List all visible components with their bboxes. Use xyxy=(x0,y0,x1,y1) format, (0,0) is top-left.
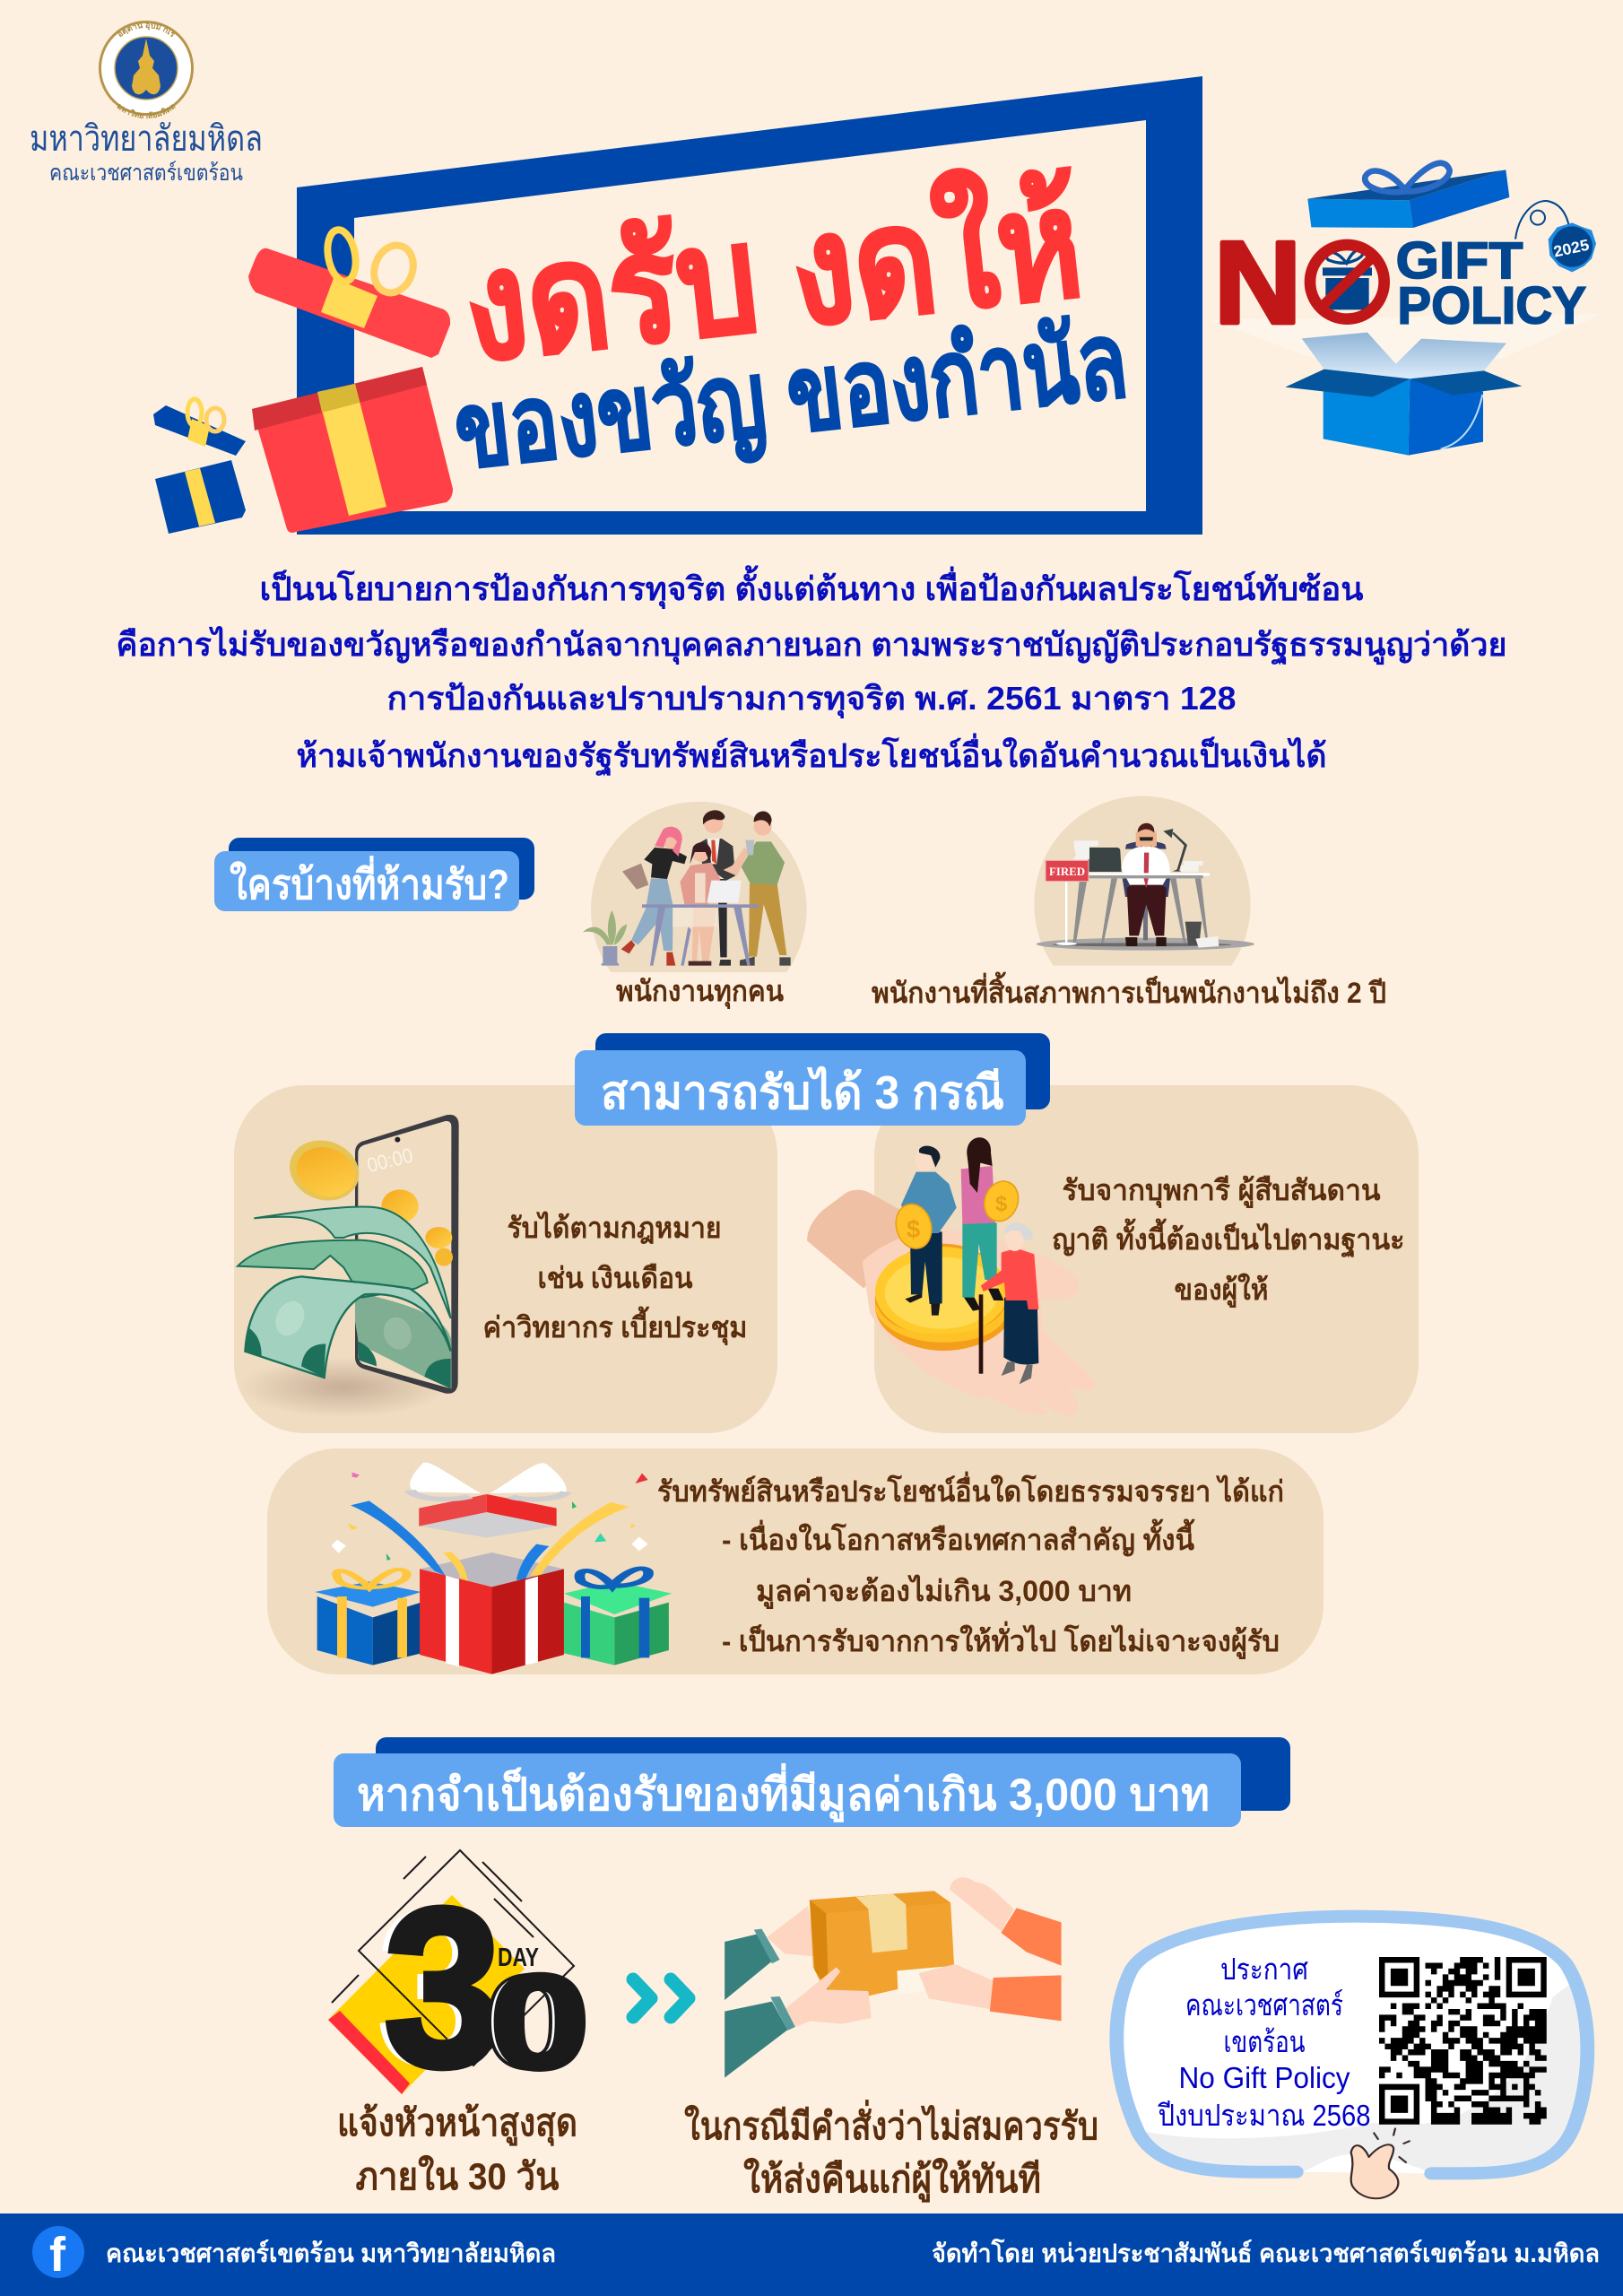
icon: Facebook: f xyxy=(49,2228,66,2282)
banknotes xyxy=(238,1206,451,1388)
icon: small blue gift box xyxy=(153,399,246,534)
paper stack xyxy=(1073,840,1098,859)
footer bar: คณะเวชศาสตร์เขตร้อน มหาวิทยาลัยมหิดล xyxy=(106,2239,556,2267)
tag 2025 xyxy=(1515,201,1596,272)
badge: three cases xyxy=(575,1033,1050,1126)
tag 2025: 2025 xyxy=(1552,236,1591,261)
policy description text xyxy=(117,565,1506,777)
sign: fired xyxy=(1046,860,1089,945)
badge: who may not accept: ใครบ้างที่ห้ามรับ? xyxy=(230,856,509,908)
middle man xyxy=(697,810,735,957)
text: notify supervisor: แจ้งหัวหน้าสูงสุด xyxy=(337,2101,577,2146)
label: all staff: พนักงานทุกคน xyxy=(616,975,784,1010)
illustration: phone, coins and banknotes xyxy=(238,1115,459,1417)
chair xyxy=(1123,841,1170,940)
illustration: hands returning a parcel xyxy=(725,1877,1062,2078)
box interior xyxy=(420,1552,564,1587)
man: $ xyxy=(907,1215,920,1243)
trash bin xyxy=(1185,922,1202,945)
footer bar xyxy=(0,2213,1623,2296)
no symbol xyxy=(1310,245,1384,319)
text: notify supervisor xyxy=(337,2101,577,2197)
icon: red gift box xyxy=(248,228,453,533)
title heading: ของขวัญ ของกำนัล xyxy=(449,300,1133,494)
title frame xyxy=(297,76,1202,535)
footer bar: จัดทำโดย หน่วยประชาสัมพันธ์ คณะเวชศาสตร์เขตร้อน ม.มหิดล xyxy=(932,2238,1600,2267)
coins xyxy=(282,1131,453,1266)
panel: from relatives xyxy=(874,1085,1419,1433)
illustration: staff team xyxy=(583,802,807,972)
badge: three cases: สามารถรับได้ 3 กรณี xyxy=(601,1065,1004,1119)
logo: No Gift Policy: POLICY xyxy=(1397,277,1586,335)
icon: 30 day: 3 xyxy=(384,1862,502,2114)
logo: Mahidol University: อตฺตานํ อุปมํ กเร xyxy=(118,22,176,38)
panel: ethical gifts xyxy=(267,1448,1324,1674)
policy description text: คือการไม่รับของขวัญหรือของกำนัลจากบุคคลภายนอก ตามพระราชบัญญัติประกอบรัฐธรรมนูญว่าด้วย xyxy=(117,625,1506,665)
phone xyxy=(355,1115,459,1394)
QR code xyxy=(1379,1957,1547,2125)
crumpled paper xyxy=(1195,936,1219,948)
man xyxy=(1122,823,1170,946)
logo: Mahidol University: มหาวิทยาลัยมหิดล xyxy=(117,104,176,118)
icon: 30 day xyxy=(328,1850,590,2114)
illustration: three gift boxes and confetti xyxy=(315,1463,672,1674)
text: ethical gifts: มูลค่าจะต้องไม่เกิน 3,000 บาท xyxy=(756,1574,1132,1610)
label: former staff less than 2 years: พนักงานที่สิ้นสภาพการเป็นพนักงานไม่ถึง 2 ปี xyxy=(872,971,1386,1009)
hand xyxy=(807,1190,1096,1416)
logo: Mahidol University xyxy=(30,21,263,186)
text: from relatives: รับจากบุพการี ผู้สืบสันดาน xyxy=(1062,1174,1381,1209)
gift lid xyxy=(1307,163,1509,228)
grandmother xyxy=(979,1223,1038,1384)
illustration: family on a gold coin in a hand xyxy=(807,1137,1096,1416)
text: return to giver xyxy=(684,2100,1098,2203)
illustration: phone, coins and banknotes: 00:00 xyxy=(365,1143,415,1177)
gold coin xyxy=(875,1244,1008,1351)
icon: Facebook xyxy=(32,2226,84,2282)
icon: finger heart hand xyxy=(1351,2128,1410,2198)
logo: No Gift Policy: GIFT xyxy=(1396,232,1523,290)
text: announcement: คณะเวชศาสตร์ xyxy=(1185,1988,1343,2022)
illustration: dismissed employee at desk xyxy=(1034,796,1254,966)
text: announcement: เขตร้อน xyxy=(1223,2025,1306,2058)
right man xyxy=(724,812,791,966)
text: ethical gifts: - เนื่องในโอกาสหรือเทศกาลสำคัญ ทั้งนี้ xyxy=(722,1518,1195,1557)
text: announcement: ปีงบประมาณ 2568 xyxy=(1157,2099,1370,2132)
text: announcement: No Gift Policy xyxy=(1178,2061,1350,2094)
flying lid and bow xyxy=(410,1463,567,1537)
logo: Mahidol University: มหาวิทยาลัยมหิดล xyxy=(30,119,263,159)
text: from relatives: ของผู้ให้ xyxy=(1175,1273,1268,1309)
seated woman xyxy=(673,842,720,964)
panel: QR announcement frame xyxy=(1116,1917,1587,2198)
man xyxy=(891,1146,957,1316)
text: ethical gifts: - เป็นการรับจากการให้ทั่วไป โดยไม่เจาะจงผู้รับ xyxy=(722,1621,1280,1660)
policy description text: เป็นนโยบายการป้องกันการทุจริต ตั้งแต่ต้นทาง เพื่อป้องกันผลประโยชน์ทับซ้อน xyxy=(260,565,1364,610)
text: from relatives: ญาติ ทั้งนี้ต้องเป็นไปตามฐานะ xyxy=(1053,1218,1404,1258)
policy description text: ห้ามเจ้าพนักงานของรัฐรับทรัพย์สินหรือประโยชน์อื่นใดอันคำนวณเป็นเงินได้ xyxy=(296,733,1327,777)
blue gift xyxy=(315,1570,421,1665)
plant xyxy=(583,910,627,966)
desk xyxy=(1073,873,1210,944)
logo: Mahidol University: คณะเวชศาสตร์เขตร้อน xyxy=(49,161,243,186)
panel: legal income xyxy=(234,1085,777,1433)
red gift xyxy=(420,1569,564,1674)
sign: fired: FIRED xyxy=(1049,865,1085,878)
streamers xyxy=(351,1500,629,1581)
text: legal income: รับได้ตามกฎหมาย xyxy=(508,1211,721,1244)
books xyxy=(1181,861,1203,872)
title heading: งดรับ งดให้ xyxy=(456,156,1089,393)
policy description text: การป้องกันและปราบปรามการทุจริต พ.ศ. 2561 มาตรา 128 xyxy=(387,680,1236,719)
text: legal income xyxy=(482,1211,748,1346)
text: notify supervisor: ภายใน 30 วัน xyxy=(355,2154,560,2197)
text: from relatives xyxy=(1053,1174,1404,1309)
text: return to giver: ในกรณีมีคำสั่งว่าไม่สมควรรับ xyxy=(684,2100,1098,2147)
pink hair woman xyxy=(621,827,687,966)
parcel xyxy=(810,1891,955,2005)
text: legal income: ค่าวิทยากร เบี้ยประชุม xyxy=(482,1306,748,1346)
title heading xyxy=(449,156,1133,494)
arrow: double chevron xyxy=(633,1979,689,2017)
laptop xyxy=(707,881,742,903)
icon: 30 day: 3 xyxy=(375,1862,493,2114)
desk xyxy=(642,904,759,966)
text: announcement xyxy=(1157,1952,1370,2132)
text: legal income: เช่น เงินเดือน xyxy=(538,1262,693,1294)
woman xyxy=(961,1137,1024,1311)
icon: 30 day: DAY xyxy=(498,1944,539,1972)
desk lamp xyxy=(1163,829,1187,872)
laptop xyxy=(1087,848,1122,872)
text: ethical gifts xyxy=(657,1471,1284,1660)
gift box base xyxy=(1285,333,1522,456)
woman: $ xyxy=(995,1192,1007,1216)
icon: 30 day: 0 xyxy=(490,1946,590,2097)
icon: 30 day: 0 xyxy=(482,1946,583,2097)
confetti xyxy=(331,1473,648,1561)
text: ethical gifts: รับทรัพย์สินหรือประโยชน์อื่นใดโดยธรรมจรรยา ได้แก่ xyxy=(657,1471,1284,1508)
badge: over 3,000 baht: หากจำเป็นต้องรับของที่มีมูลค่าเกิน 3,000 บาท xyxy=(357,1763,1210,1822)
logo: No Gift Policy: N xyxy=(1214,217,1301,348)
badge: who may not accept xyxy=(214,838,534,911)
logo: No Gift Policy xyxy=(1211,163,1602,456)
badge: over 3,000 baht xyxy=(334,1737,1290,1827)
green gift xyxy=(564,1569,672,1665)
text: announcement: ประกาศ xyxy=(1220,1952,1308,1986)
text: return to giver: ให้ส่งคืนแก่ผู้ให้ทันที xyxy=(743,2157,1041,2203)
